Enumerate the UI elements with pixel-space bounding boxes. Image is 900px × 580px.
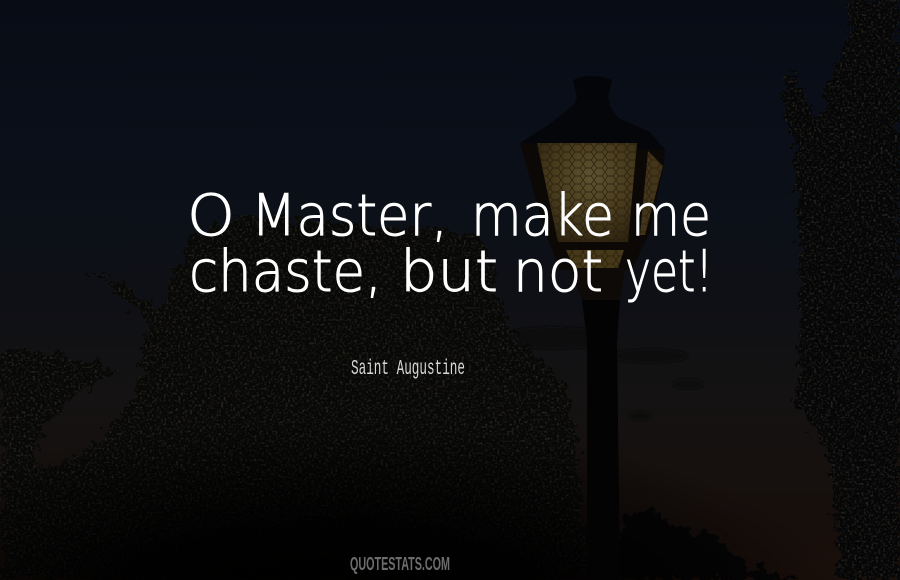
trees: left and centre foliage [0, 215, 590, 580]
lamp housing [520, 76, 665, 300]
lamp roof [520, 100, 665, 150]
quote line 1: make [471, 183, 614, 249]
quote line 1: Master, [251, 183, 448, 249]
quote line 2: chaste, [189, 239, 382, 305]
quote line 2: but [400, 239, 498, 305]
trees: low bushes near the post [610, 510, 800, 580]
background: dark ground vignette [0, 400, 900, 580]
quote line 1: O [187, 183, 235, 249]
watermark: QUOTESTATS.COM [350, 554, 450, 574]
quote line 2: not [513, 239, 603, 305]
background: distant clouds [493, 327, 704, 421]
quote line 1 [187, 183, 711, 249]
lamp frame [520, 143, 665, 270]
lamp base [570, 268, 625, 300]
lamp cap [573, 76, 612, 104]
trees: right foliage [780, 0, 900, 580]
quote text [187, 183, 713, 305]
glass lower [566, 250, 624, 268]
glass side [640, 151, 663, 235]
quote line 2 [189, 239, 713, 305]
glass front [537, 143, 637, 242]
lamp post [520, 76, 665, 580]
quote line 1: me [631, 183, 711, 249]
author: Saint Augustine [351, 358, 465, 381]
quote line 2: yet! [625, 239, 713, 305]
post column [582, 300, 620, 580]
